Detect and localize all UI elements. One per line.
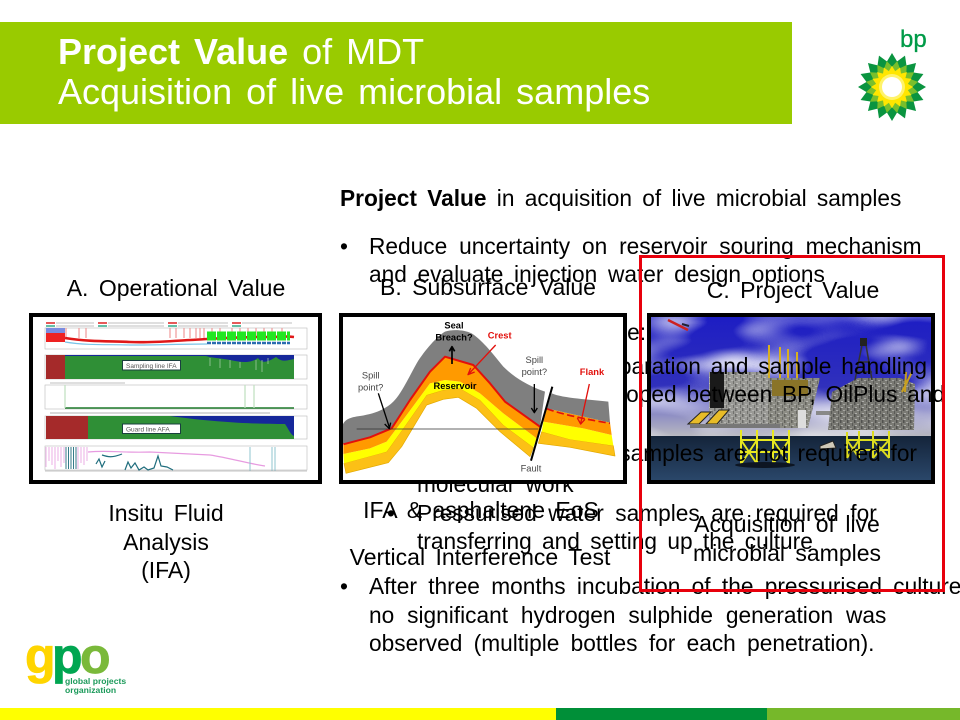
labels: Fault (521, 464, 542, 474)
line partly hidden behind panels: procedure: (538, 319, 646, 345)
legend strips (46, 323, 292, 326)
header banner (0, 22, 792, 124)
axis ticks (45, 470, 307, 472)
labels: Reservoir (433, 381, 477, 391)
labels: point? (522, 367, 547, 377)
title (58, 31, 650, 112)
caption: IFA and asphaltene EoS: IFA & asphaltene EoS (363, 497, 599, 523)
caption: C. Project Value: C. Project Value (707, 277, 879, 303)
caption: B. Subsurface Value: B. Subsurface Value (380, 274, 596, 300)
caption: Vertical Interference Test: Vertical Interference Test (350, 544, 610, 570)
labels: point? (358, 383, 383, 393)
icon: gpo logo: global projects (65, 676, 126, 686)
grey cap rock (343, 330, 545, 444)
bullet: reduce uncertainty (340, 233, 922, 287)
body text block: Pressurised water samples are required for (417, 500, 877, 526)
body text block: After three months incubation of the pressurised culture (369, 573, 960, 599)
panel A: IFA log chart (29, 313, 322, 484)
bullet: after three months: • (340, 573, 348, 599)
body text block: no significant hydrogen sulphide generation was (369, 602, 886, 628)
icon: bp logo (858, 26, 927, 121)
bullet: after three months (340, 573, 960, 656)
heading: project value statement: Project Value in acquisition of live microbial samples (340, 185, 901, 211)
caption: Acquisition of live microbial samples: microbial samples (693, 540, 881, 566)
red top-of-reservoir line (343, 357, 540, 444)
panel B: reservoir cross-section (339, 313, 627, 484)
labels: Spill (362, 371, 379, 381)
arrows (449, 347, 455, 364)
caption: A. Operational Value: A. Operational Value (67, 275, 285, 301)
panel C: offshore platform image (647, 313, 935, 484)
sub-bullet: pressurised water: • (387, 500, 395, 526)
gold layer (344, 388, 533, 473)
red highlight rectangle (639, 255, 945, 592)
caption: Insitu Fluid Analysis (IFA): (IFA) (141, 557, 191, 583)
labels: Seal (444, 320, 464, 330)
body text block: transferring and setting up the culture (417, 528, 813, 554)
panel A: IFA log chart: Sampling line IFA (126, 363, 177, 370)
caption: Acquisition of live microbial samples: Acquisition of live (694, 511, 880, 537)
caption: Insitu Fluid Analysis (IFA): Analysis (123, 528, 209, 554)
right platform (828, 338, 915, 458)
row 3 flags (50, 382, 125, 384)
title: Acquisition of live microbial samples (58, 71, 650, 112)
labels: Spill (526, 355, 543, 365)
row 4 bars (50, 412, 270, 414)
title: Project Value of MDT (58, 31, 424, 72)
spill line (357, 428, 538, 430)
supply boat (820, 441, 836, 449)
sub-bullet: preparation: preparation and sample handling (586, 353, 927, 379)
panel A: IFA log chart: Guard line AFA (126, 426, 170, 434)
caption: Insitu Fluid Analysis (IFA): Insitu Fluid (108, 500, 224, 526)
body text block: and evaluate injection water design options (369, 261, 825, 287)
sub-bullet: developed between: developed between BP, OilPlus and (572, 381, 945, 407)
icon: bp logo: bp (900, 26, 927, 53)
body text block (340, 185, 960, 656)
body text block: observed (multiple bottles for each penetration). (369, 630, 874, 656)
yellow layer (343, 380, 537, 463)
sub-bullet: samples not required: samples are not required for (619, 440, 917, 466)
caption: Acquisition of live microbial samples (693, 511, 881, 566)
left platform (688, 345, 862, 468)
helicopter (668, 320, 688, 330)
caption: Insitu Fluid Analysis (IFA) (108, 500, 224, 583)
sub-bullet continuation: molecular work: molecular work (417, 471, 574, 497)
orange layer (343, 357, 540, 454)
labels: Crest (488, 331, 512, 341)
labels: Flank (580, 367, 605, 377)
labels (358, 320, 605, 474)
bullet: reduce uncertainty: • (340, 233, 348, 259)
row 1 traces (45, 328, 307, 349)
sub-bullet: pressurised water (387, 500, 877, 554)
icon: gpo logo (25, 640, 126, 695)
labels: Breach? (435, 332, 473, 342)
row 2 bars (45, 355, 307, 379)
footer colour bar (0, 708, 960, 720)
icon: gpo logo: organization (65, 685, 116, 695)
fault (531, 387, 552, 461)
row 5 traces (45, 446, 307, 470)
body text block: Reduce uncertainty on reservoir souring mechanism (369, 233, 922, 259)
